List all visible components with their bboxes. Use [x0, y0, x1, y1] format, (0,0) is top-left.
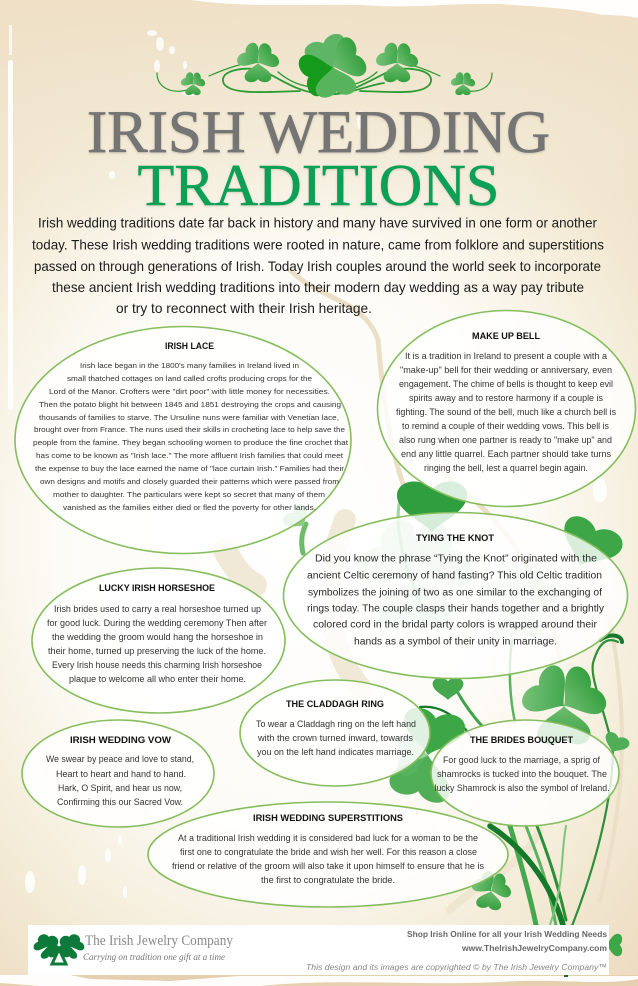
- text: irish wedding vow: Heart to heart and hand to hand.: [56, 769, 186, 779]
- text: claddagh ring: [256, 719, 416, 757]
- text: irish wedding vow: Confirming this our Sacred Vow.: [57, 797, 183, 807]
- text: irish wedding vow: [46, 754, 194, 807]
- intro text: today. These Irish wedding traditions were rooted in nature, came from folklore and superstitions: [32, 238, 604, 252]
- heading: claddagh ring: THE CLADDAGH RING: [286, 699, 384, 709]
- text: irish lace: has come to be known as "Irish lace." The more affluent Irish families that could meet: [36, 451, 344, 460]
- text: lucky irish horseshoe: [47, 604, 267, 684]
- shop line: Shop Irish Online for all your Irish Wedding Needs: [407, 929, 607, 939]
- text: make up bell: "make-up" bell for their wedding or anniversary, even: [400, 365, 612, 375]
- text: irish lace: brought over from France. The nuns used their skills in crocheting lace to help save the: [34, 425, 345, 434]
- tan background stems: [225, 270, 622, 910]
- text: irish lace: own designs and motifs and closely guarded their patterns which were passed from: [40, 477, 339, 486]
- panel: brides bouquet: [431, 720, 619, 826]
- heading: irish wedding vow: IRISH WEDDING VOW: [70, 735, 172, 745]
- text: lucky irish horseshoe: their home, turned up preserving the luck of the home.: [48, 646, 266, 656]
- text: irish lace: the expense to buy the lace earned the name of "lace curtain Irish." Families had their: [35, 464, 344, 473]
- intro text: or try to reconnect with their Irish heritage.: [116, 301, 372, 316]
- text: irish wedding vow: Hark, O Spirit, and hear us now,: [58, 783, 182, 793]
- text: brides bouquet: lucky Shamrock is also the symbol of Ireland.: [434, 783, 610, 793]
- text: make up bell: spirits away and to restore harmony if a couple is: [409, 393, 604, 403]
- text: irish lace: Then the potato blight hit between 1845 and 1851 destroying the crops and causing: [39, 400, 341, 409]
- title: TRADITIONS: [138, 152, 500, 218]
- text: irish lace: Lord of the Manor. Crofters were "dirt poor" with little money for necessities.: [49, 387, 330, 396]
- panel: tying the knot: [284, 512, 628, 678]
- text: superstitions: At a traditional Irish wedding it is considered bad luck for a woman to be the: [178, 833, 478, 843]
- text: claddagh ring: To wear a Claddagh ring on the left hand: [256, 719, 416, 729]
- ornament: shamrocks and vines: [157, 31, 492, 99]
- heading: tying the knot: TYING THE KNOT: [416, 533, 495, 543]
- text: lucky irish horseshoe: for good luck. During the wedding ceremony Then after: [47, 618, 267, 628]
- title: [87, 99, 550, 218]
- text: make up bell: It is a tradition in Ireland to present a couple with a: [405, 351, 607, 361]
- text: tying the knot: colored cord in the bridal party colors is wrapped around their: [313, 620, 598, 630]
- text: irish lace: small thatched cottages on land called crofts producing crops for the: [67, 374, 312, 383]
- text: superstitions: friend or relative of the groom will also take it upon himself to ensure that he is: [172, 861, 485, 871]
- text: make up bell: engagement. The chime of bells is thought to keep evil: [399, 379, 613, 389]
- footer band: [28, 925, 609, 975]
- text: irish lace: thousands of families to starve. The Ursuline nuns were familiar with Venetian lace,: [39, 413, 339, 422]
- intro text: passed on through generations of Irish. Today Irish couples around the world seek to incorporate: [34, 259, 601, 274]
- text: claddagh ring: you on the left hand indicates marriage.: [257, 747, 414, 757]
- text: lucky irish horseshoe: the wedding the groom would hang the horseshoe in: [52, 632, 263, 642]
- text: irish lace: mother to daughter. The particulars were kept so secret that many of them: [53, 490, 325, 499]
- heading: irish lace: IRISH LACE: [165, 341, 214, 351]
- intro text: Irish wedding traditions date far back in history and many have survived in one form or another: [38, 216, 597, 230]
- text: superstitions: [172, 833, 485, 885]
- copyright: This design and its images are copyrighted © by The Irish Jewelry Company™: [306, 962, 607, 972]
- text: make up bell: end any little quarrel. Each partner should take turns: [401, 449, 612, 459]
- intro text: [32, 216, 604, 316]
- heading: superstitions: IRISH WEDDING SUPERSTITIONS: [253, 813, 403, 823]
- heading: make up bell: MAKE UP BELL: [472, 331, 541, 341]
- text: brides bouquet: shamrocks is tucked into the bouquet. The: [437, 769, 607, 779]
- text: irish lace: vanished as the families either died or fled the poverty for other lands.: [63, 503, 316, 512]
- text: tying the knot: rings today. The couple clasps their hands together and a brightly: [307, 604, 604, 614]
- text: lucky irish horseshoe: Irish brides used to carry a real horseshoe turned up: [54, 604, 261, 614]
- text: make up bell: fighting. The sound of the bell, much like a church bell is: [396, 407, 617, 417]
- panel: lucky irish horseshoe: [32, 568, 285, 713]
- text: tying the knot: Did you know the phrase “Tying the Knot” originated with the: [315, 554, 598, 564]
- green plant stems: [302, 500, 622, 926]
- panel: irish lace: [15, 326, 351, 554]
- text: brides bouquet: For good luck to the marriage, a sprig of: [443, 755, 601, 765]
- company name: The Irish Jewelry Company: [85, 933, 233, 949]
- icon: company logo: [32, 934, 86, 964]
- text: lucky irish horseshoe: plaque to welcome all who enter their home.: [69, 674, 246, 684]
- panel: irish wedding vow: [22, 720, 214, 827]
- text: irish lace: [33, 361, 349, 512]
- panel: claddagh ring: [240, 680, 430, 786]
- intro text: these ancient Irish wedding traditions into their modern day wedding as a way pay tribute: [52, 280, 584, 295]
- text: irish lace: Irish lace began in the 1800's many families in Ireland lived in: [80, 361, 299, 370]
- panel: irish wedding superstitions: [148, 802, 508, 907]
- text: make up bell: also rung when one partner is ready to "make up" and: [399, 435, 612, 445]
- company tagline: Carrying on tradition one gift at a time: [83, 952, 225, 963]
- text: tying the knot: hands as a symbol of their unity in marriage.: [354, 636, 557, 648]
- background shamrocks: [280, 481, 631, 977]
- text: tying the knot: ancient Celtic ceremony of hand fasting? This old Celtic tradition: [307, 570, 602, 582]
- heading: lucky irish horseshoe: LUCKY IRISH HORSESHOE: [99, 583, 215, 593]
- text: irish lace: people from the famine. They began schooling women to produce the fine crochet that: [33, 438, 349, 447]
- text: lucky irish horseshoe: Every Irish house needs this charming Irish horseshoe: [52, 660, 262, 670]
- text: claddagh ring: with the crown turned inward, towards: [257, 733, 414, 743]
- text: superstitions: first one to congratulate the bride and wish her well. For this reason a close: [180, 847, 477, 857]
- text: brides bouquet: [434, 755, 610, 793]
- text: tying the knot: [307, 554, 604, 648]
- text: irish wedding vow: We swear by peace and love to stand,: [46, 754, 194, 764]
- text: tying the knot: symbolizes the joining of two as one similar to the exchanging of: [308, 588, 602, 598]
- text: make up bell: ringing the bell, lest a quarrel begin again.: [424, 463, 588, 473]
- title: IRISH WEDDING: [87, 99, 550, 165]
- text: make up bell: to remind a couple of their wedding vows. This bell is: [402, 421, 610, 431]
- website: www.TheIrishJewelryCompany.com: [461, 943, 607, 953]
- panel: make up bell: [378, 310, 636, 506]
- heading: brides bouquet: THE BRIDES BOUQUET: [470, 735, 573, 745]
- text: make up bell: [396, 351, 617, 473]
- text: superstitions: the first to congratulate the bride.: [261, 875, 395, 885]
